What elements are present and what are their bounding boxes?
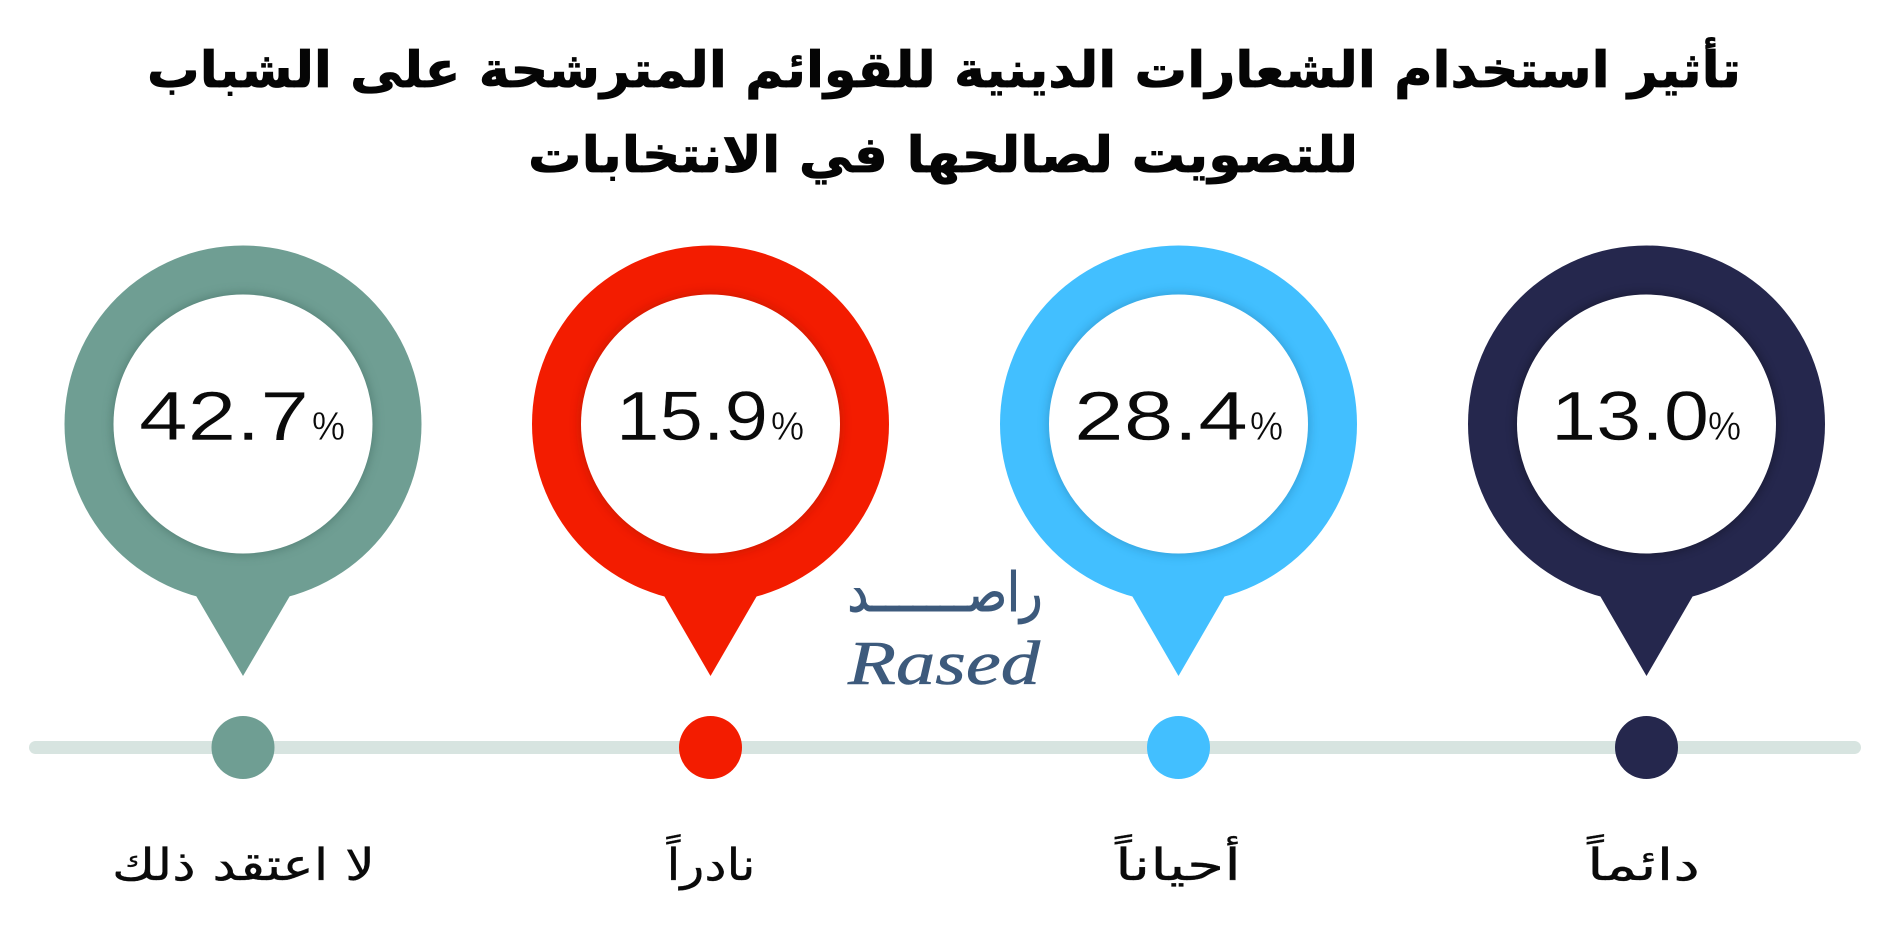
pin: green — [64, 246, 422, 676]
dot — [679, 716, 742, 779]
column: دائماً — [1468, 246, 1825, 891]
column: لا اعتقد ذلك — [64, 246, 422, 891]
pin: blue — [1000, 246, 1357, 676]
dot — [1615, 716, 1678, 779]
logo: Rased: راصـــــــد — [848, 561, 1042, 624]
label: نادراً — [666, 833, 756, 891]
label: أحياناً — [1114, 833, 1241, 891]
value: 28.4%: 28.4 — [1074, 377, 1248, 456]
value: 15.9%: % — [771, 405, 804, 449]
logo: Rased: Rased — [847, 630, 1041, 698]
column: أحياناً — [1000, 246, 1357, 891]
title: للتصويت لصالحها في الانتخابات — [528, 126, 1358, 185]
value: 42.7%: % — [312, 405, 345, 449]
title — [147, 37, 1741, 185]
pin: navy — [1468, 246, 1825, 676]
pin: red — [532, 246, 889, 676]
value: 28.4%: % — [1250, 405, 1283, 449]
value: 15.9%: 15.9 — [616, 377, 768, 455]
column: نادراً — [532, 246, 889, 891]
label: دائماً — [1586, 833, 1700, 891]
timeline line — [29, 741, 1861, 754]
value: 13.0%: % — [1708, 405, 1741, 449]
value: 13.0%: 13.0 — [1551, 377, 1709, 456]
dot — [1147, 716, 1210, 779]
logo: Rased — [847, 561, 1042, 698]
label: لا اعتقد ذلك — [112, 840, 375, 891]
value: 42.7%: 42.7 — [139, 376, 309, 455]
title: تأثير استخدام الشعارات الدينية للقوائم المترشحة على الشباب — [147, 37, 1741, 100]
dot — [212, 716, 274, 779]
